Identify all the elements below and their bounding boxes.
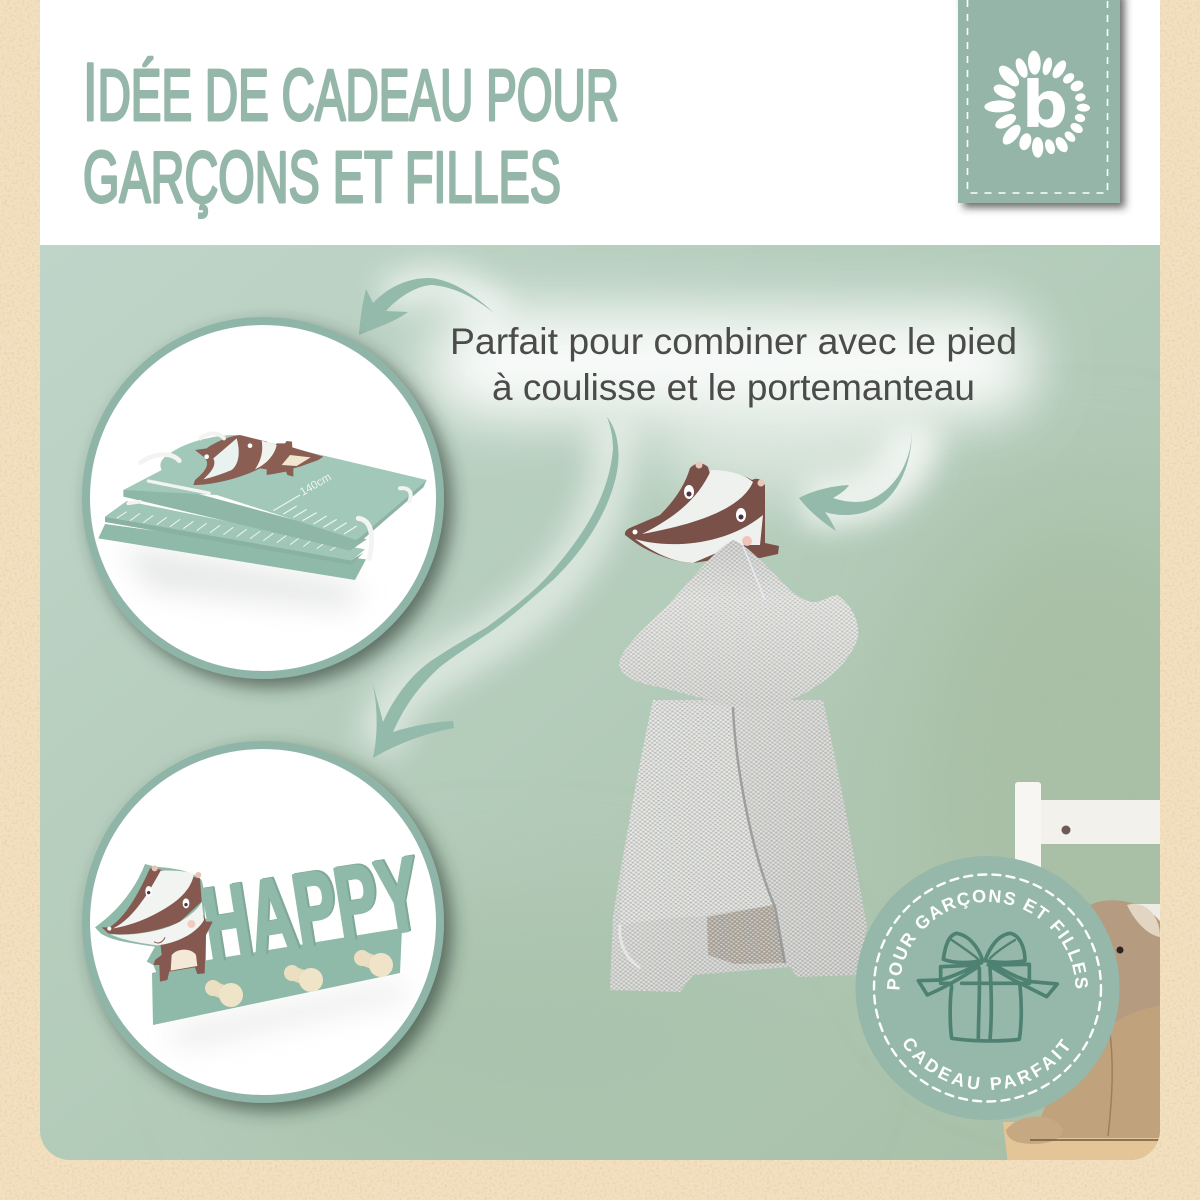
rack shadow	[181, 986, 394, 1046]
photo panel	[40, 245, 1200, 1165]
message line 1: Parfait pour combiner avec le pied	[450, 321, 1017, 362]
hook badger	[625, 462, 779, 563]
white header band	[40, 0, 1160, 245]
HAPPY letters	[204, 854, 415, 960]
title line 1: IDÉE DE CADEAU POUR	[83, 47, 619, 138]
rack badger	[95, 864, 213, 982]
message line 2: à coulisse et le portemanteau	[492, 367, 975, 408]
logo letter: b	[1022, 69, 1068, 143]
arrow: to coat rack	[372, 417, 619, 758]
HAPPY letters: HAPPY	[195, 835, 428, 985]
HAPPY letters: HAPPY	[197, 834, 430, 984]
wooden shelf	[1003, 1122, 1159, 1160]
title line 2: GARÇONS ET FILLES	[83, 138, 561, 218]
knitted blanket	[610, 462, 867, 992]
ropes	[128, 433, 411, 558]
panel: height chart circle	[86, 321, 440, 675]
icon: flower logo	[984, 50, 1090, 158]
title	[83, 47, 619, 218]
logo tag	[958, 0, 1120, 203]
panel: coat rack circle	[86, 745, 440, 1099]
blanket hood	[619, 540, 858, 709]
bed frame	[1015, 782, 1160, 922]
rack plate	[152, 928, 402, 1025]
pegs	[205, 950, 393, 1007]
coat rack product	[95, 854, 415, 1046]
dashed ring	[874, 874, 1101, 1102]
chart label: 140cm	[298, 471, 334, 499]
badge: gift seal	[856, 856, 1120, 1120]
blanket body	[610, 700, 867, 992]
teddy bear	[1006, 900, 1165, 1144]
white glow behind message and arrows	[380, 284, 1035, 750]
badge bottom text: CADEAU PARFAIT	[904, 1038, 1070, 1090]
badge top text: POUR GARÇONS ET FILLES	[887, 890, 1088, 990]
chart badger	[193, 435, 323, 485]
arrow: to height chart	[359, 278, 494, 335]
wall	[40, 245, 1200, 1160]
message text	[450, 321, 1017, 408]
icon: gift box	[918, 933, 1057, 1041]
height chart product	[98, 433, 427, 610]
arrow: to hook	[799, 426, 912, 531]
